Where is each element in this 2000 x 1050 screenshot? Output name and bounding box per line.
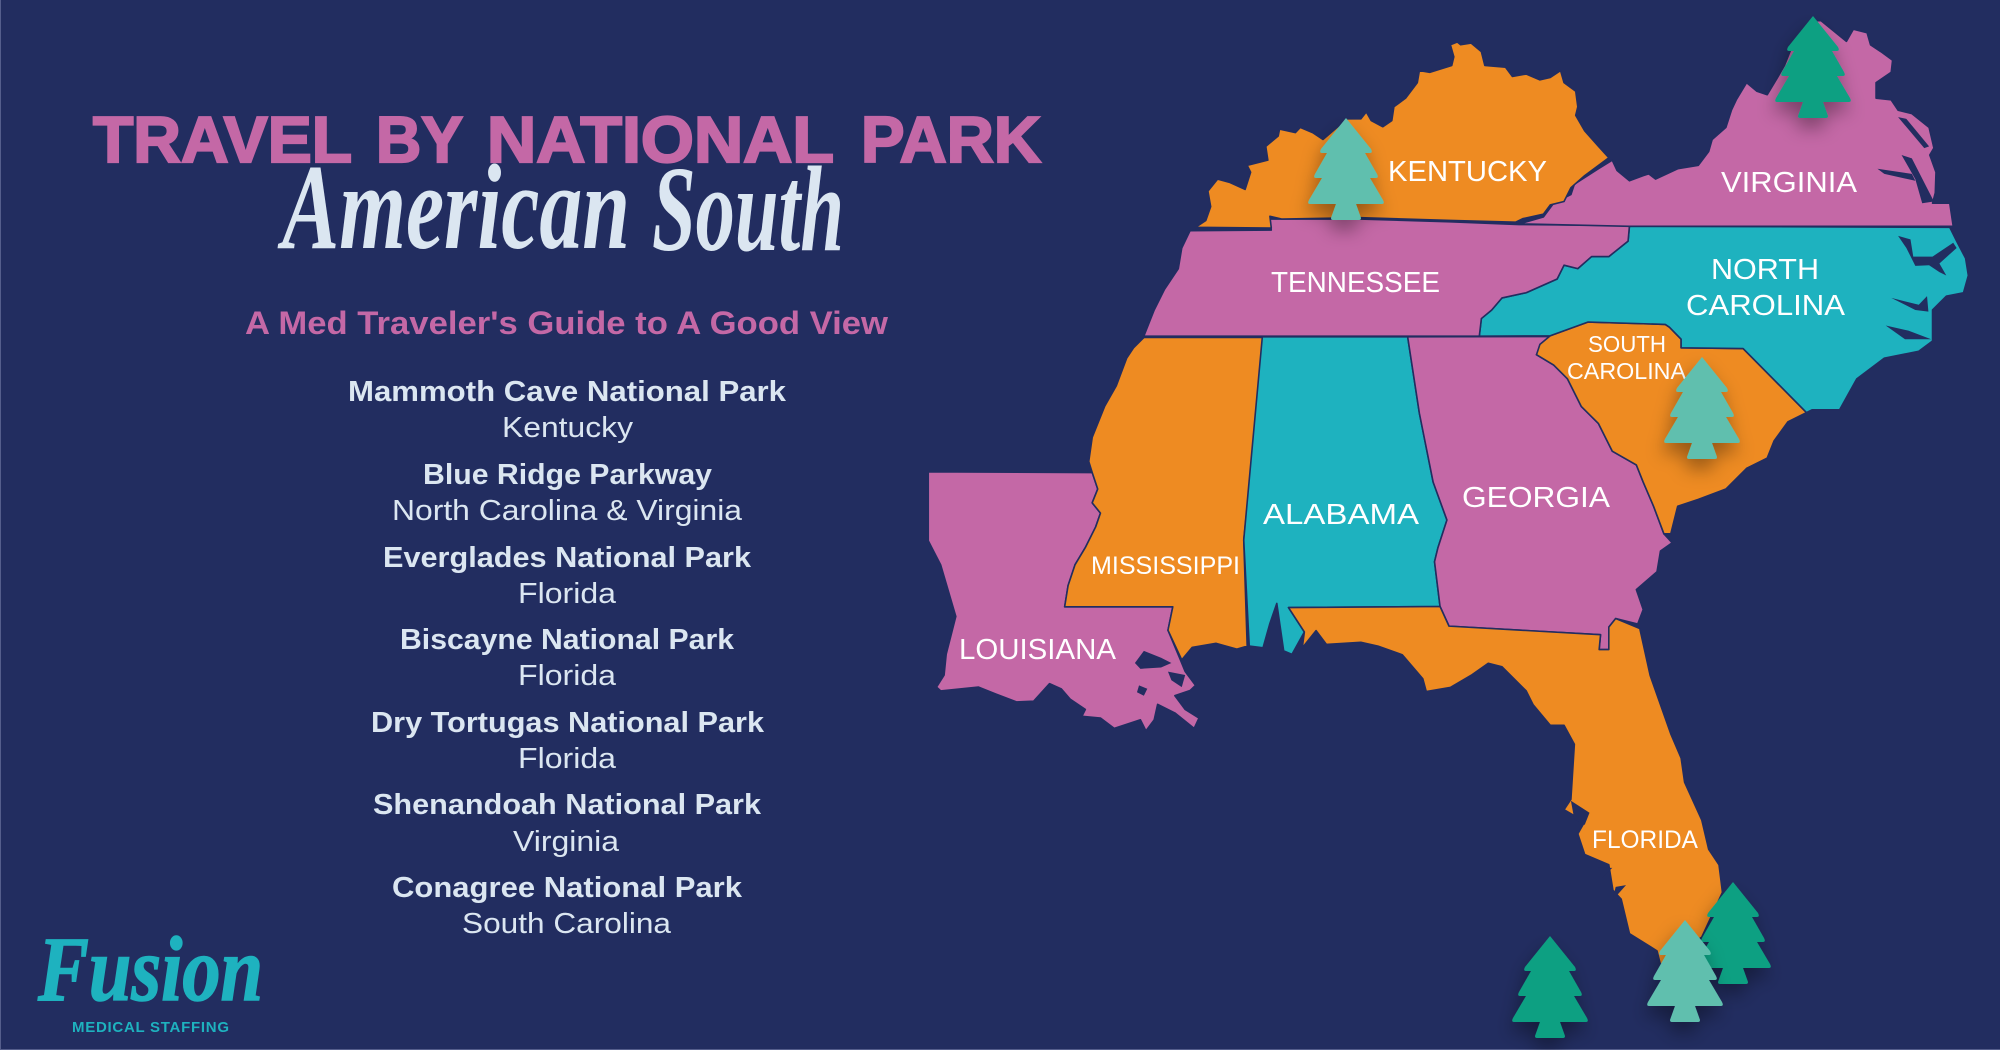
- title: BY: [376, 103, 463, 176]
- title: NATIONAL: [487, 103, 834, 176]
- icon: tree Mammoth Cave: [1308, 118, 1384, 220]
- tagline: A Med Traveler's Guide to A Good View: [245, 305, 888, 341]
- state: North Carolina: [1479, 226, 1968, 413]
- state: Alabama: [1244, 337, 1447, 654]
- icon: tree Biscayne: [1695, 882, 1771, 984]
- park: Dry Tortugas: Dry Tortugas National Park: [371, 707, 765, 739]
- park: Everglades: Everglades National Park: [383, 542, 752, 574]
- icon: tree Shenandoah: [1775, 16, 1851, 118]
- park: Mammoth Cave: [348, 376, 787, 444]
- park: Blue Ridge: Blue Ridge Parkway: [423, 459, 712, 491]
- logo: Fusion Medical Staffing: Fusion: [37, 918, 263, 1020]
- icon: tree Conagree: [1664, 357, 1740, 459]
- label: Mississippi: MISSISSIPPI: [1091, 552, 1240, 580]
- title: TRAVEL: [93, 103, 352, 176]
- park: Biscayne: [400, 624, 735, 692]
- park: Dry Tortugas: Florida: [518, 743, 617, 775]
- park: Conagree: [392, 872, 743, 940]
- title: PARK: [861, 103, 1041, 176]
- state labels: [959, 156, 1858, 854]
- state: Florida: [1289, 606, 1722, 965]
- label: Alabama: ALABAMA: [1263, 499, 1420, 531]
- script subtitle: American South: South: [652, 142, 844, 277]
- logo: Fusion Medical Staffing: MEDICAL STAFFING: [72, 1019, 229, 1036]
- label: Virginia: VIRGINIA: [1721, 167, 1858, 199]
- park: Blue Ridge: [392, 459, 743, 527]
- park: Biscayne: Biscayne National Park: [400, 624, 735, 656]
- park: Dry Tortugas: [371, 707, 765, 775]
- script subtitle: American South: American: [277, 140, 630, 275]
- park: Conagree: South Carolina: [462, 908, 672, 940]
- title: [93, 103, 1041, 176]
- icon: tree Everglades: [1647, 920, 1723, 1022]
- label: Florida: FLORIDA: [1592, 826, 1698, 854]
- park: Everglades: [383, 542, 752, 610]
- label: Georgia: GEORGIA: [1462, 482, 1611, 514]
- label: Kentucky: KENTUCKY: [1388, 156, 1547, 188]
- park: Blue Ridge: North Carolina & Virginia: [392, 495, 743, 527]
- state: Mississippi: [1065, 338, 1264, 660]
- state: Georgia: [1408, 336, 1672, 650]
- label: Tennessee: TENNESSEE: [1271, 267, 1440, 299]
- state: Tennessee: [1144, 219, 1629, 336]
- icon: tree Dry Tortugas: [1512, 936, 1588, 1038]
- park: Conagree: Conagree National Park: [392, 872, 743, 904]
- label: South Carolina: SOUTH: [1588, 331, 1666, 357]
- park: Mammoth Cave: Mammoth Cave National Park: [348, 376, 787, 408]
- state: South Carolina: [1536, 322, 1806, 534]
- park: Everglades: Florida: [518, 578, 617, 610]
- park: Biscayne: Florida: [518, 660, 617, 692]
- park: Mammoth Cave: Kentucky: [502, 412, 634, 444]
- label: North Carolina: NORTH: [1711, 254, 1819, 286]
- water inlets and bays: [1135, 117, 1957, 901]
- state: Virginia: [1519, 21, 1953, 226]
- label: North Carolina: [1686, 254, 1846, 322]
- park: Shenandoah: Virginia: [513, 826, 620, 858]
- park: Shenandoah: Shenandoah National Park: [373, 789, 762, 821]
- state: Louisiana: [928, 472, 1199, 731]
- park: Shenandoah: [373, 789, 762, 858]
- label: South Carolina: CAROLINA: [1567, 358, 1687, 384]
- label: Louisiana: LOUISIANA: [959, 634, 1117, 666]
- state: Kentucky: [1196, 42, 1609, 228]
- label: South Carolina: [1567, 331, 1687, 384]
- label: North Carolina: CAROLINA: [1686, 290, 1846, 322]
- map of southern states: [928, 21, 1968, 965]
- park list: [348, 376, 787, 940]
